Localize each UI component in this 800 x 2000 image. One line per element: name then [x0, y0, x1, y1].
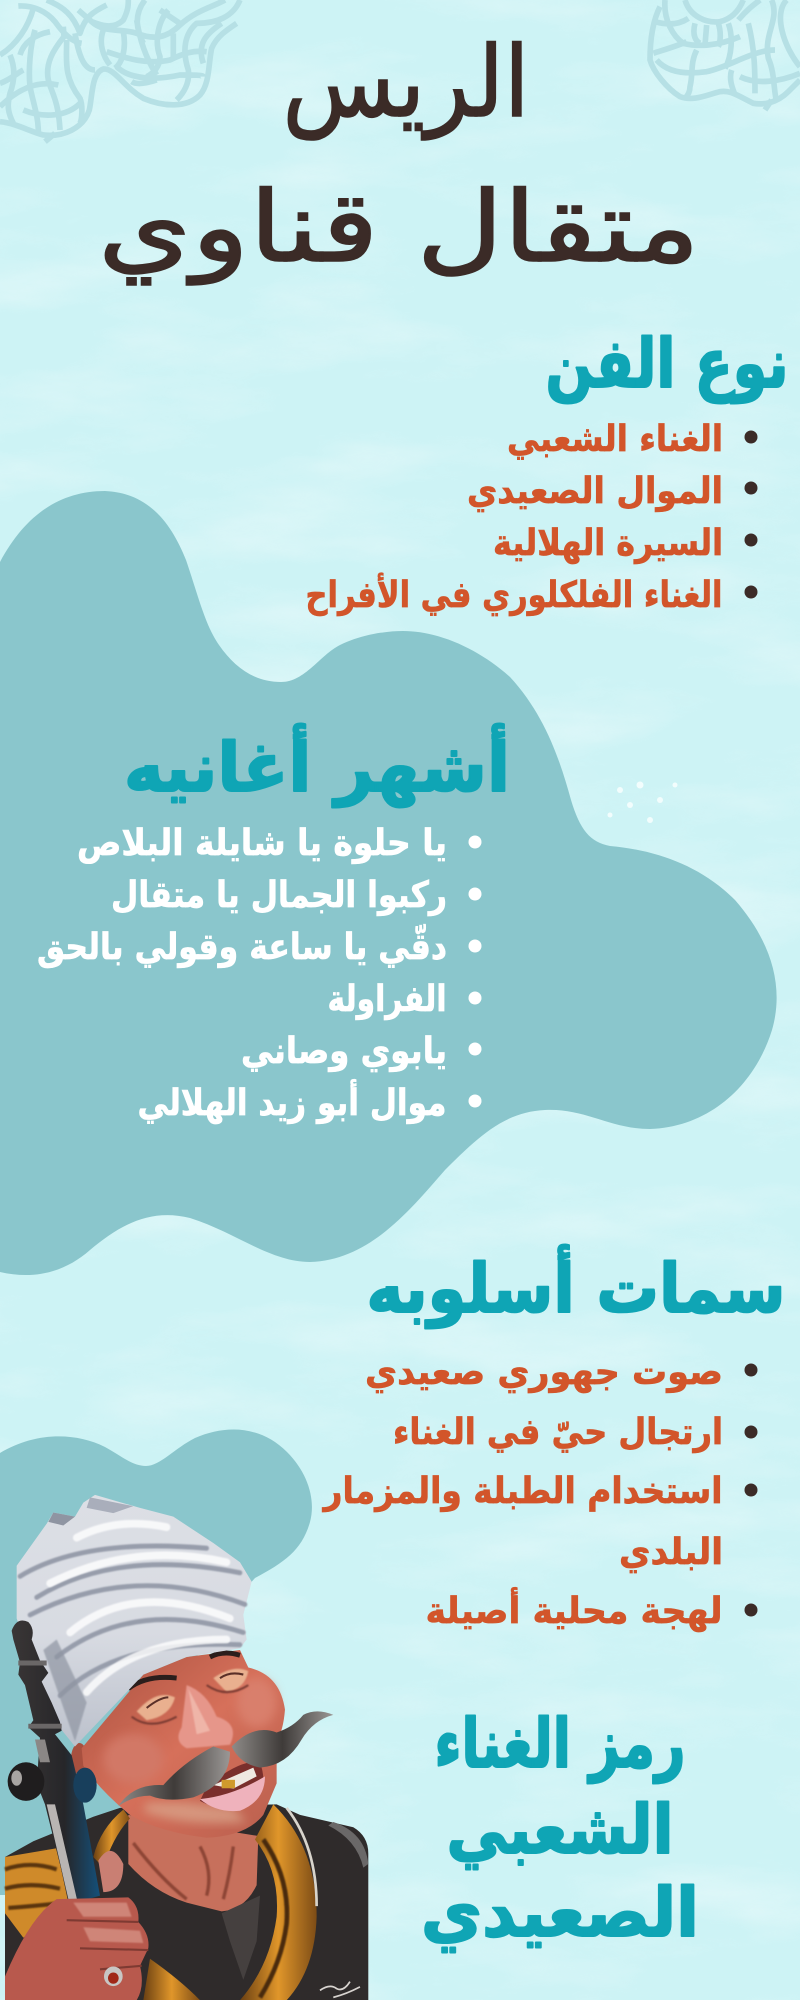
closing slogan: الشعبي	[446, 1791, 674, 1870]
title: متقال قناوي	[98, 171, 700, 285]
sash left	[5, 1848, 68, 1938]
list: famous songs	[37, 823, 482, 1124]
portrait: caricature of the singer	[5, 1495, 368, 2000]
decoration: fishing net top left	[0, 0, 240, 142]
list: famous songs: ركبوا الجمال يا متقال	[111, 875, 447, 916]
list: famous songs: يا حلوة يا شايلة البلاص	[77, 823, 447, 864]
mijwiz pipe	[8, 1621, 100, 1904]
decoration: fishing net top right	[650, 0, 800, 110]
list: style features	[322, 1352, 758, 1632]
list: art type: الغناء الفلكلوري في الأفراح	[306, 572, 722, 616]
section: famous songs	[37, 723, 510, 1124]
signature	[320, 1982, 360, 1997]
nose	[178, 1685, 233, 1748]
closing slogan	[421, 1705, 699, 1953]
list: style features: ارتجال حيّ في الغناء	[393, 1412, 723, 1453]
section: style features	[322, 1244, 786, 1632]
hand	[5, 1897, 149, 2000]
heading: famous songs: أشهر أغانيه	[124, 723, 510, 808]
list: art type: الموال الصعيدي	[467, 471, 723, 512]
cheek highlight	[237, 1678, 277, 1727]
inner shirt	[222, 1896, 260, 1980]
list: art type: الغناء الشعبي	[507, 419, 723, 460]
title: الريس	[282, 26, 530, 140]
turban	[17, 1495, 252, 1747]
closing slogan: الصعيدي	[421, 1874, 699, 1953]
closing slogan: رمز الغناء	[434, 1705, 686, 1784]
list: famous songs: الفراولة	[328, 979, 446, 1020]
sash right	[240, 1804, 317, 2000]
head	[82, 1650, 285, 1838]
list: style features: لهجة محلية أصيلة	[426, 1587, 722, 1632]
section: art type	[306, 325, 788, 616]
blob: small teal shape behind portrait	[0, 1430, 312, 1895]
mouth and teeth	[200, 1762, 263, 1809]
list: famous songs: يابوي وصاني	[241, 1031, 447, 1072]
vest	[5, 1804, 368, 2000]
neck	[128, 1815, 258, 1911]
ring	[104, 1967, 123, 1986]
list: famous songs: موال أبو زيد الهلالي	[138, 1079, 446, 1124]
sash left collar	[93, 1810, 130, 1868]
list: famous songs: دقّي يا ساعة وقولي بالحق	[37, 924, 447, 968]
blob: large teal shape	[0, 491, 777, 1275]
list: style features: البلدي	[619, 1532, 723, 1573]
list: art type	[306, 419, 758, 616]
title	[98, 26, 700, 285]
list: art type: السيرة الهلالية	[493, 523, 723, 564]
moustache	[232, 1711, 333, 1768]
list: style features: صوت جهوري صعيدي	[365, 1352, 723, 1393]
list: style features: استخدام الطبلة والمزمار	[322, 1471, 722, 1512]
ear	[71, 1743, 88, 1775]
eyes and brows	[137, 1695, 175, 1720]
